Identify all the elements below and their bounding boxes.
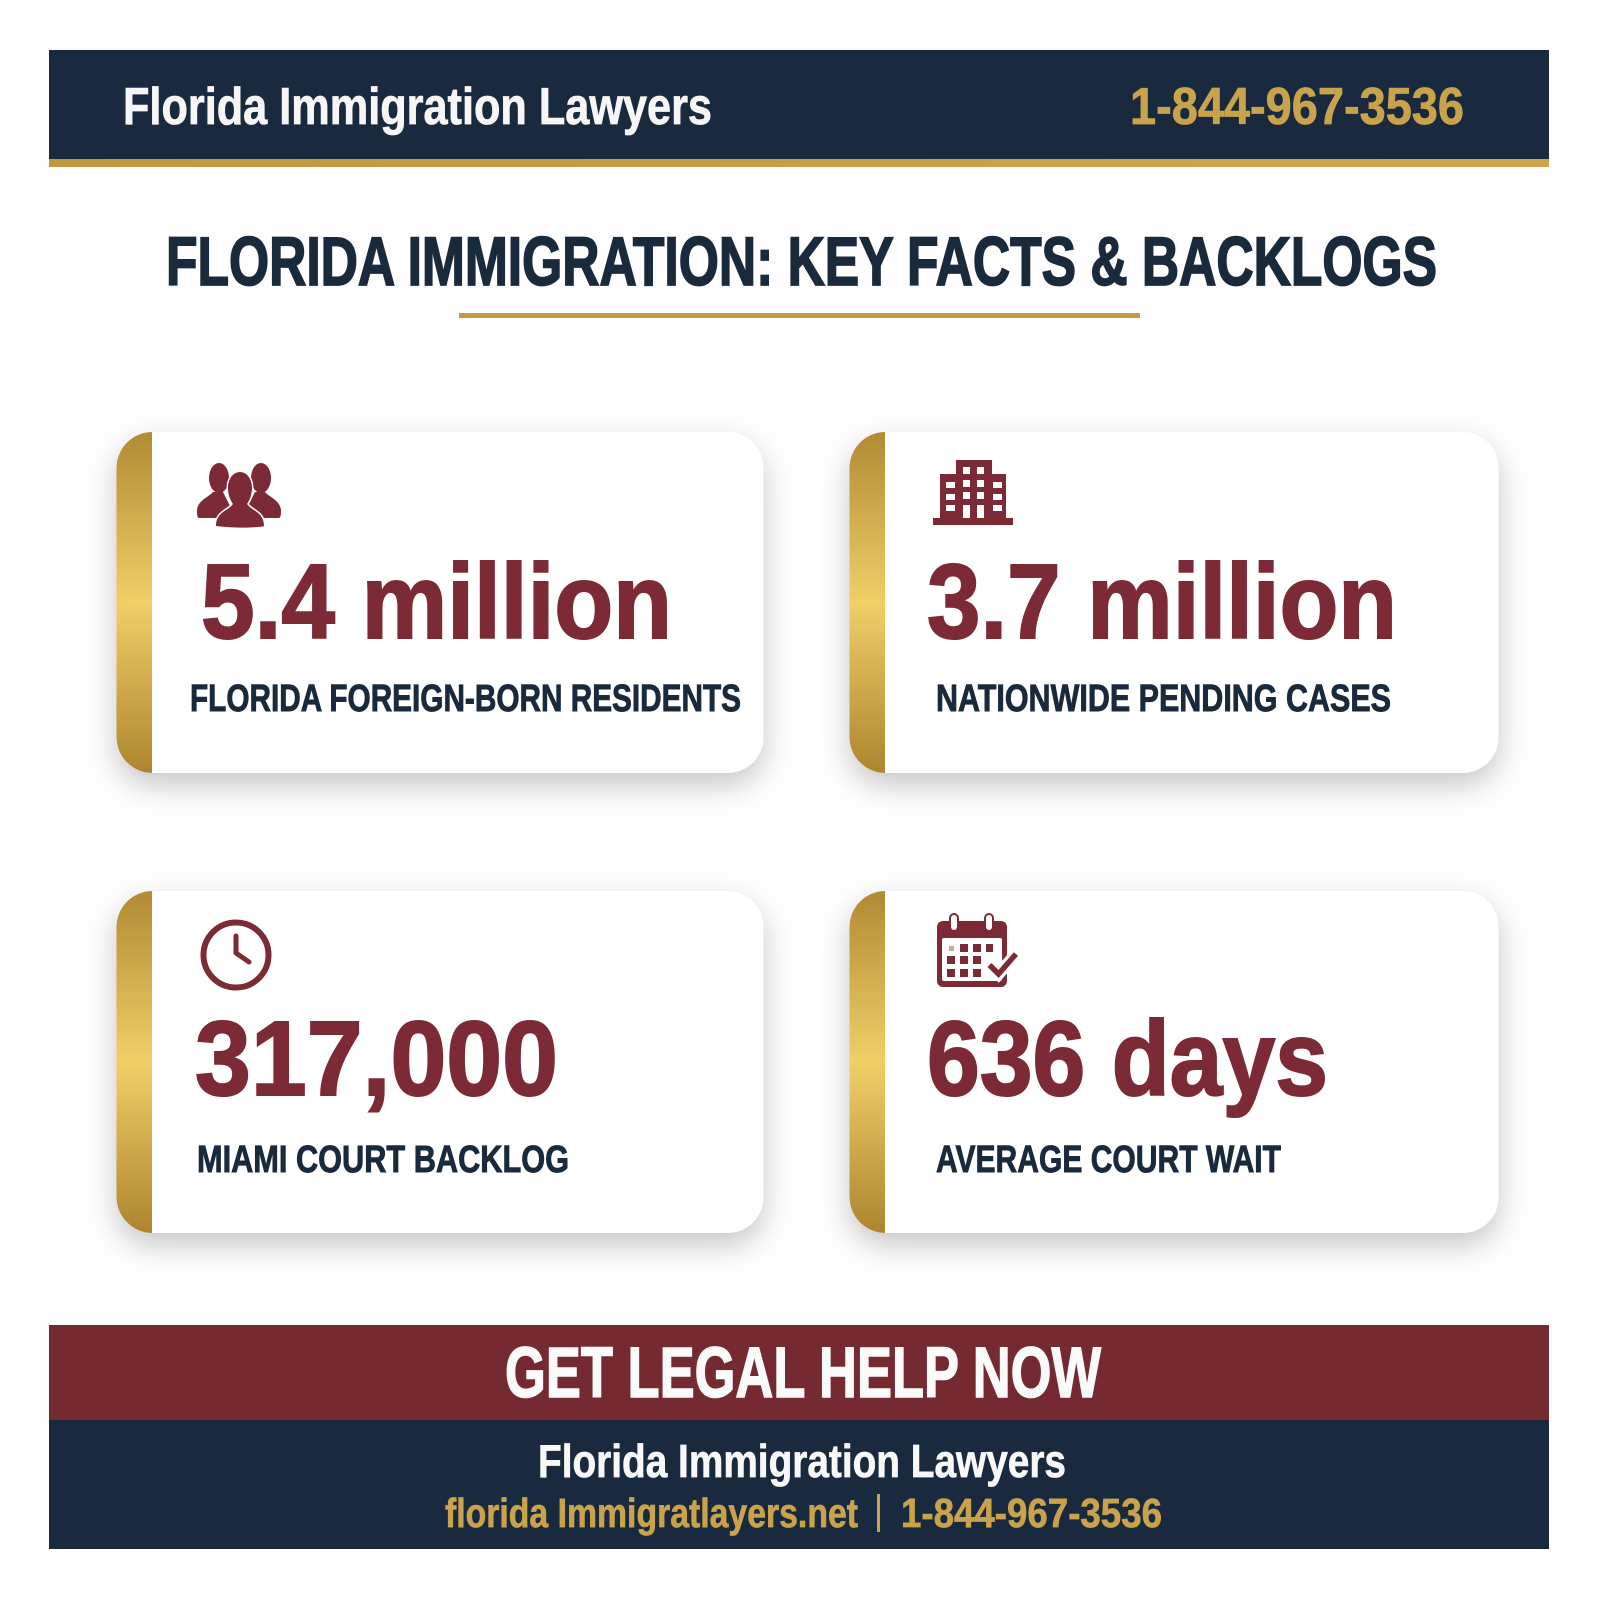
label: average court wait: AVERAGE COURT WAIT — [936, 1139, 1281, 1181]
footer contact bar — [49, 1420, 1549, 1549]
statistic: 5.4 million: 5.4 million — [201, 543, 672, 661]
call-to-action text: GET LEGAL HELP NOW — [505, 1334, 1101, 1413]
label: nationwide pending cases: NATIONWIDE PENDING CASES — [936, 678, 1391, 720]
panel: Miami court backlog — [116, 891, 764, 1233]
footer firm name: Florida Immigration Lawyers — [538, 1435, 1066, 1487]
panel: average court wait — [849, 891, 1498, 1233]
footer divider — [877, 1494, 880, 1532]
top header bar — [49, 50, 1549, 167]
header firm name: Florida Immigration Lawyers — [123, 78, 712, 136]
panel: Florida foreign-born residents — [116, 432, 764, 773]
footer website: florida Immigratlayers.net — [445, 1490, 858, 1536]
label: Miami court backlog: MIAMI COURT BACKLOG — [197, 1139, 569, 1181]
title underline — [459, 313, 1140, 318]
label: Florida foreign-born residents: FLORIDA FOREIGN-BORN RESIDENTS — [190, 678, 741, 720]
header phone number: 1-844-967-3536 — [1130, 78, 1464, 136]
footer phone number: 1-844-967-3536 — [901, 1490, 1162, 1536]
icon: clock — [204, 922, 268, 988]
icon: people — [197, 463, 281, 528]
statistic: 3.7 million: 3.7 million — [927, 543, 1397, 661]
panel: nationwide pending cases — [849, 432, 1498, 773]
icon: calendar with check — [937, 914, 1016, 987]
statistic: 317,000: 317,000 — [195, 1000, 558, 1118]
call-to-action banner — [49, 1325, 1549, 1420]
statistic: 636 days: 636 days — [927, 1000, 1328, 1118]
icon: building — [933, 460, 1013, 525]
